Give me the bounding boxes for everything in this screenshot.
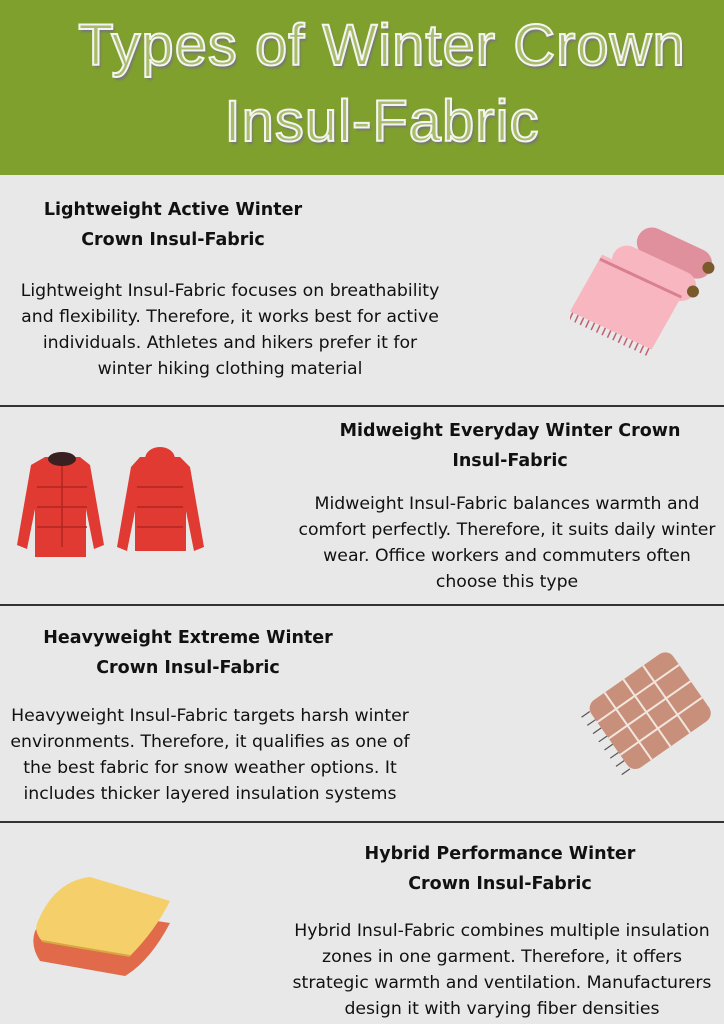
heading: heavyweight: Heavyweight Extreme Winter bbox=[43, 628, 333, 648]
text: lightweight: winter hiking clothing material bbox=[98, 359, 362, 379]
text: lightweight: and flexibility. Therefore, it works best for active bbox=[21, 307, 439, 327]
heading: heavyweight: Crown Insul-Fabric bbox=[96, 658, 280, 678]
text: midweight bbox=[298, 494, 716, 592]
icon: red jackets bbox=[17, 447, 204, 557]
heading: midweight bbox=[340, 421, 680, 471]
title: Insul-Fabric bbox=[224, 89, 539, 154]
panel: heavyweight bbox=[10, 628, 711, 804]
heading: midweight: Insul-Fabric bbox=[452, 451, 568, 471]
heading: heavyweight bbox=[43, 628, 333, 678]
heading: lightweight: Crown Insul-Fabric bbox=[81, 230, 265, 250]
icon: folded yellow fabric bbox=[33, 877, 170, 976]
text: heavyweight: environments. Therefore, it qualifies as one of bbox=[10, 732, 410, 752]
text: heavyweight: includes thicker layered insulation systems bbox=[23, 784, 396, 804]
panel: hybrid bbox=[33, 844, 711, 1019]
text: heavyweight: the best fabric for snow weather options. It bbox=[23, 758, 397, 778]
text: midweight: choose this type bbox=[436, 572, 578, 592]
icon: pink fabric roll bbox=[570, 228, 714, 356]
text: lightweight: individuals. Athletes and hikers prefer it for bbox=[43, 333, 417, 353]
text: hybrid: strategic warmth and ventilation. Manufacturers bbox=[293, 973, 711, 993]
text: heavyweight bbox=[10, 706, 410, 804]
icon: plaid blanket bbox=[581, 652, 711, 776]
title: Types of Winter Crown bbox=[78, 13, 686, 78]
heading: hybrid: Crown Insul-Fabric bbox=[408, 874, 592, 894]
heading: lightweight: Lightweight Active Winter bbox=[44, 200, 302, 220]
text: hybrid: Hybrid Insul-Fabric combines multiple insulation bbox=[294, 921, 710, 941]
panel: midweight bbox=[17, 421, 716, 592]
heading: hybrid: Hybrid Performance Winter bbox=[365, 844, 635, 864]
text: lightweight: Lightweight Insul-Fabric focuses on breathability bbox=[21, 281, 439, 301]
text: hybrid bbox=[293, 921, 711, 1019]
title bbox=[78, 13, 686, 154]
heading: lightweight bbox=[44, 200, 302, 250]
text: hybrid: design it with varying fiber densities bbox=[344, 999, 660, 1019]
heading: midweight: Midweight Everyday Winter Crown bbox=[340, 421, 680, 441]
text: lightweight bbox=[21, 281, 439, 379]
text: midweight: comfort perfectly. Therefore, it suits daily winter bbox=[298, 520, 716, 540]
text: midweight: Midweight Insul-Fabric balances warmth and bbox=[315, 494, 699, 514]
text: midweight: wear. Office workers and commuters often bbox=[323, 546, 691, 566]
heading: hybrid bbox=[365, 844, 636, 894]
text: hybrid: zones in one garment. Therefore, it offers bbox=[322, 947, 682, 967]
header banner bbox=[0, 0, 724, 175]
panel: lightweight bbox=[21, 200, 714, 379]
text: heavyweight: Heavyweight Insul-Fabric targets harsh winter bbox=[11, 706, 409, 726]
